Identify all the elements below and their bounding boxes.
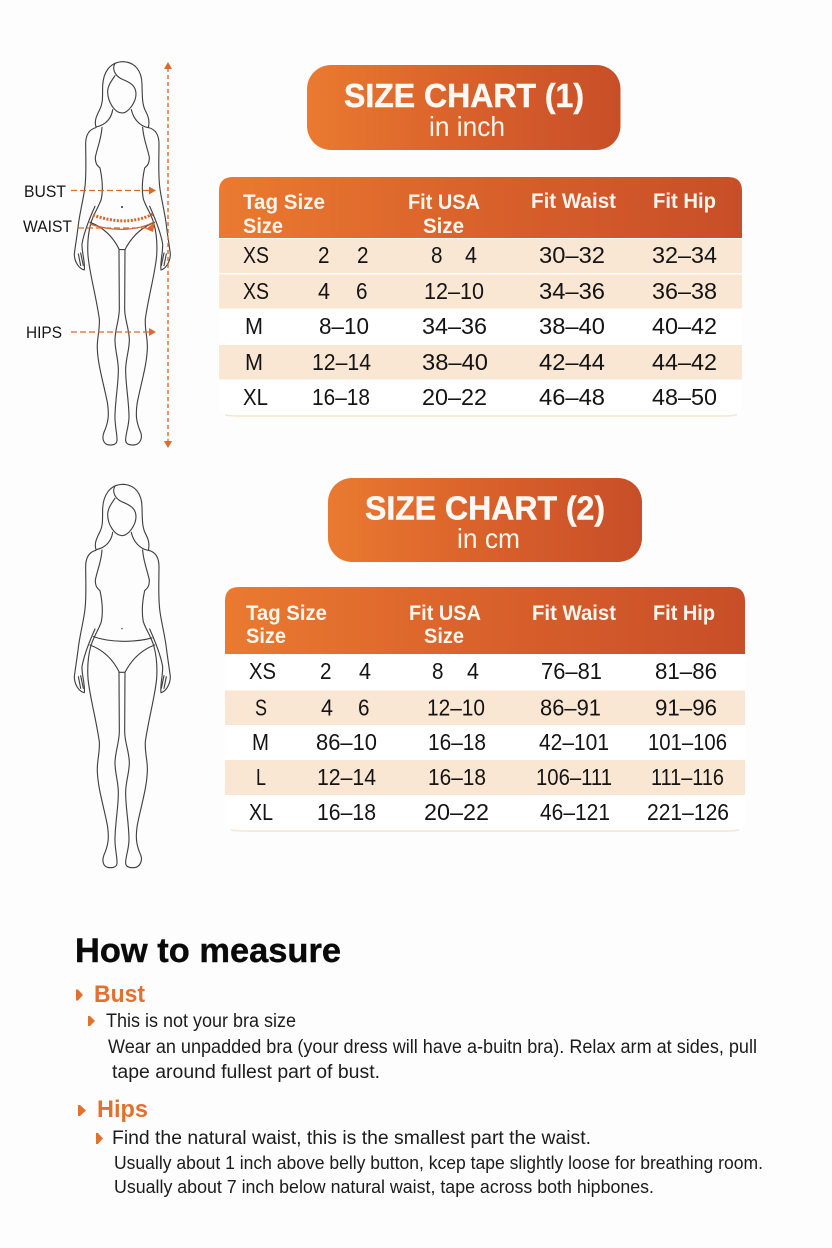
section: bust xyxy=(76,981,757,1083)
bust text: This is not your bra size xyxy=(106,1011,296,1032)
row 2 xyxy=(219,274,742,308)
row 5: 48–50 xyxy=(652,384,717,410)
table header: Size xyxy=(424,625,464,648)
row 1: 8 xyxy=(431,242,442,268)
row 1: 8 xyxy=(432,658,444,684)
table header: Tag Size xyxy=(246,602,327,625)
icon: body outline xyxy=(74,62,170,445)
title: size chart 2 xyxy=(328,478,642,562)
icon: bust arrow xyxy=(76,990,83,1000)
row 3 xyxy=(252,729,727,755)
bust text: Wear an unpadded bra (your dress will have a-buitn bra). Relax arm at sides, pull xyxy=(108,1037,757,1058)
row 5: 16–18 xyxy=(312,384,370,410)
table: size chart 1 in inch xyxy=(219,177,742,416)
row 5: XL xyxy=(249,799,273,825)
row 5 xyxy=(243,384,717,410)
label and arrow: bust xyxy=(24,182,156,201)
row 4: 12–14 xyxy=(312,349,371,375)
row 4 xyxy=(225,760,745,795)
table header: Fit Hip xyxy=(653,190,716,213)
label and arrow: hips: HIPS xyxy=(26,323,62,342)
table header: Size xyxy=(243,215,283,238)
row 1: 30–32 xyxy=(539,242,605,268)
icon: bust note arrow xyxy=(88,1016,95,1026)
row 1: 32–34 xyxy=(652,242,717,268)
row 1: 81–86 xyxy=(655,658,717,684)
table header: Fit USA xyxy=(408,191,480,214)
figure: plain body outline xyxy=(74,484,170,868)
table header xyxy=(225,587,745,654)
row 3: 16–18 xyxy=(428,729,486,755)
row 2: 6 xyxy=(356,278,368,304)
hips text: Find the natural waist, this is the smallest part the waist. xyxy=(112,1128,591,1149)
label and arrow: waist: WAIST xyxy=(23,217,72,236)
row 1 xyxy=(249,658,717,684)
row 4: 44–42 xyxy=(652,349,717,375)
row 3: 86–10 xyxy=(316,729,377,755)
row 3 xyxy=(245,313,717,339)
row 1: 4 xyxy=(359,658,371,684)
bust text: tape around fullest part of bust. xyxy=(112,1062,380,1083)
row 4: 12–14 xyxy=(317,764,376,790)
row 2: S xyxy=(255,694,267,720)
title: size chart 1: in inch xyxy=(429,111,505,142)
row 1: 2 xyxy=(318,242,330,268)
row 5: 20–22 xyxy=(422,384,487,410)
height arrow xyxy=(164,62,172,448)
row 3: M xyxy=(245,313,263,339)
row 5: XL xyxy=(243,384,268,410)
row 5 xyxy=(249,799,729,825)
label and arrow: hips xyxy=(26,323,156,342)
row 4: M xyxy=(245,349,263,375)
row 2: 6 xyxy=(358,694,370,720)
row 4 xyxy=(219,345,742,380)
table header: Fit USA xyxy=(409,602,481,625)
row 1: XS xyxy=(249,658,276,684)
table header: Size xyxy=(246,625,286,648)
table bottom edge xyxy=(225,415,737,416)
row 1 xyxy=(219,239,742,273)
row 2: 91–96 xyxy=(655,694,717,720)
bust heading: Bust xyxy=(94,981,145,1008)
table bottom edge xyxy=(231,830,739,831)
row 1: 76–81 xyxy=(541,658,602,684)
table header: Fit Waist xyxy=(531,190,616,213)
row 3: 101–106 xyxy=(648,729,727,755)
row 2: 4 xyxy=(318,278,330,304)
row 3: 34–36 xyxy=(422,313,487,339)
title: size chart 1 xyxy=(307,65,620,150)
row 5: 221–126 xyxy=(647,799,729,825)
row 5: 46–121 xyxy=(540,799,610,825)
row 4: 42–44 xyxy=(539,349,605,375)
row 1: 2 xyxy=(320,658,332,684)
row 3: 40–42 xyxy=(652,313,717,339)
hips text: Usually about 7 inch below natural waist, tape across both hipbones. xyxy=(114,1177,654,1197)
row 2: 4 xyxy=(321,694,333,720)
row 2: 12–10 xyxy=(427,694,485,720)
heading: how to measure: How to measure xyxy=(75,932,341,970)
table header: Fit Hip xyxy=(653,602,715,625)
row 4: 111–116 xyxy=(651,764,724,790)
hips text xyxy=(112,1128,763,1197)
row 1: 4 xyxy=(465,242,477,268)
row 2 xyxy=(225,690,745,725)
title: size chart 1: SIZE CHART (1) xyxy=(344,77,584,114)
row 3: 42–101 xyxy=(539,729,609,755)
waist dotted band xyxy=(93,214,153,221)
title: size chart 2: in cm xyxy=(457,523,520,554)
section: hips xyxy=(78,1096,763,1197)
label and arrow: waist xyxy=(23,217,155,236)
row 4: 106–111 xyxy=(536,764,612,790)
row 2: 36–38 xyxy=(652,278,717,304)
row 4: 38–40 xyxy=(422,349,488,375)
waist curve xyxy=(90,222,154,229)
icon: navel dot xyxy=(121,206,123,208)
row 4: L xyxy=(256,764,266,790)
row 2: XS xyxy=(243,278,269,304)
table header: Size xyxy=(423,215,464,238)
row 1: XS xyxy=(243,242,269,268)
row 2: 12–10 xyxy=(424,278,484,304)
row 3: 38–40 xyxy=(539,313,605,339)
icon: hips note arrow xyxy=(96,1133,103,1144)
hips heading: Hips xyxy=(97,1096,148,1123)
row 1: 4 xyxy=(467,658,479,684)
row 5: 20–22 xyxy=(424,799,489,825)
figure: body with measurement lines xyxy=(23,62,172,448)
table: size chart 2 in cm xyxy=(225,587,745,831)
table header: Fit Waist xyxy=(532,602,616,625)
bust text xyxy=(106,1011,757,1083)
row 2: 86–91 xyxy=(540,694,601,720)
hips text: Usually about 1 inch above belly button, kcep tape slightly loose for breathing room. xyxy=(114,1153,763,1173)
row 5: 16–18 xyxy=(317,799,376,825)
row 5: 46–48 xyxy=(539,384,605,410)
table header: Tag Size xyxy=(243,191,325,214)
label and arrow: bust: BUST xyxy=(24,182,66,201)
row 4: 16–18 xyxy=(428,764,486,790)
table base xyxy=(225,655,745,831)
row 3: 8–10 xyxy=(319,313,369,339)
row 2: 34–36 xyxy=(539,278,605,304)
title: size chart 2: SIZE CHART (2) xyxy=(365,490,605,526)
table base xyxy=(219,239,742,416)
table header xyxy=(219,177,742,238)
row 1: 2 xyxy=(357,242,368,268)
row 3: M xyxy=(252,729,269,755)
icon: hips arrow xyxy=(78,1105,86,1116)
